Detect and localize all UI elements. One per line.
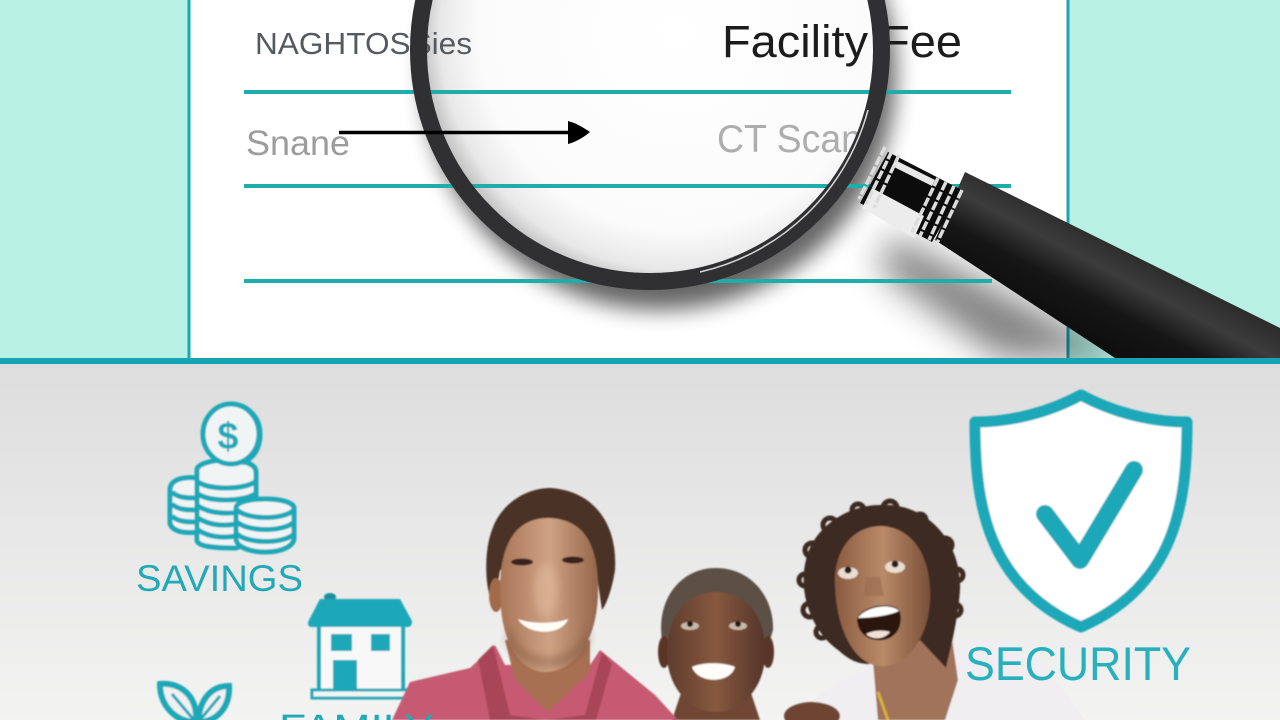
face	[500, 518, 598, 672]
magnifier silver highlight	[862, 188, 924, 238]
text: SECURITY: SECURITY	[965, 637, 1191, 690]
shirt	[800, 638, 1085, 720]
hair	[486, 488, 615, 610]
brows and eyes	[511, 556, 584, 566]
magnifier lens	[422, 0, 878, 278]
door	[333, 660, 357, 691]
person: man	[392, 488, 678, 720]
icon: house	[308, 593, 412, 698]
icon: security shield	[975, 395, 1187, 627]
person: middle woman	[658, 568, 774, 720]
nose	[864, 577, 884, 596]
icon: magnifying glass	[418, 0, 1280, 358]
neck	[672, 690, 760, 720]
magnifier collar rings	[859, 147, 962, 243]
shield outline	[975, 395, 1187, 627]
walls	[319, 624, 403, 692]
third table line	[244, 279, 992, 283]
polo shirt	[392, 645, 678, 720]
person: right woman	[784, 501, 1085, 720]
magnifier handle	[935, 172, 1280, 358]
dollar coin	[203, 404, 260, 464]
neck	[505, 640, 590, 712]
collar shading	[478, 645, 612, 720]
right coin stack	[236, 499, 294, 552]
text: SAVINGS: SAVINGS	[136, 558, 303, 599]
windows	[331, 634, 352, 651]
face	[667, 592, 765, 712]
magnifier rim highlight	[700, 110, 868, 272]
panel: mint background	[0, 0, 1280, 360]
raised hand	[784, 702, 840, 720]
document table lines	[244, 92, 1011, 186]
check mark	[1045, 470, 1134, 560]
text: CT Scan: CT Scan	[717, 118, 862, 161]
chimney	[324, 593, 336, 601]
necklace	[878, 692, 888, 720]
eyes	[681, 621, 747, 630]
base	[312, 690, 408, 698]
arrow	[339, 121, 590, 144]
magnifier rim	[418, 0, 882, 282]
ear	[489, 578, 503, 612]
center coin stack	[197, 460, 256, 548]
dollar coin: $	[217, 416, 239, 458]
eyes	[838, 560, 905, 579]
hair curls	[799, 501, 963, 638]
panel: lower gray background	[0, 364, 1280, 720]
ears	[658, 636, 670, 668]
open mouth	[857, 605, 901, 640]
icon: savings coins	[170, 404, 294, 552]
smile	[518, 619, 568, 632]
face	[835, 526, 930, 666]
text: Facility Fee heading: Facility Fee	[722, 16, 962, 67]
hair	[661, 568, 773, 640]
icon: plant leaves	[160, 684, 229, 720]
panel: white document	[189, 0, 1068, 360]
magnifier top glint	[892, 160, 935, 186]
nose highlight	[534, 564, 558, 616]
smile	[692, 663, 735, 680]
magnifier shadow	[424, 0, 1130, 358]
left coin stack	[170, 478, 198, 533]
text: garbled row label: NAGHTOSSies	[255, 26, 472, 61]
magnifier neck	[860, 152, 962, 242]
roof	[308, 599, 412, 627]
hair	[804, 505, 960, 668]
beard shadow	[506, 625, 590, 667]
divider bar	[0, 358, 1280, 364]
text: garbled second row label: Snane	[246, 124, 350, 163]
neck and chest	[872, 625, 958, 720]
